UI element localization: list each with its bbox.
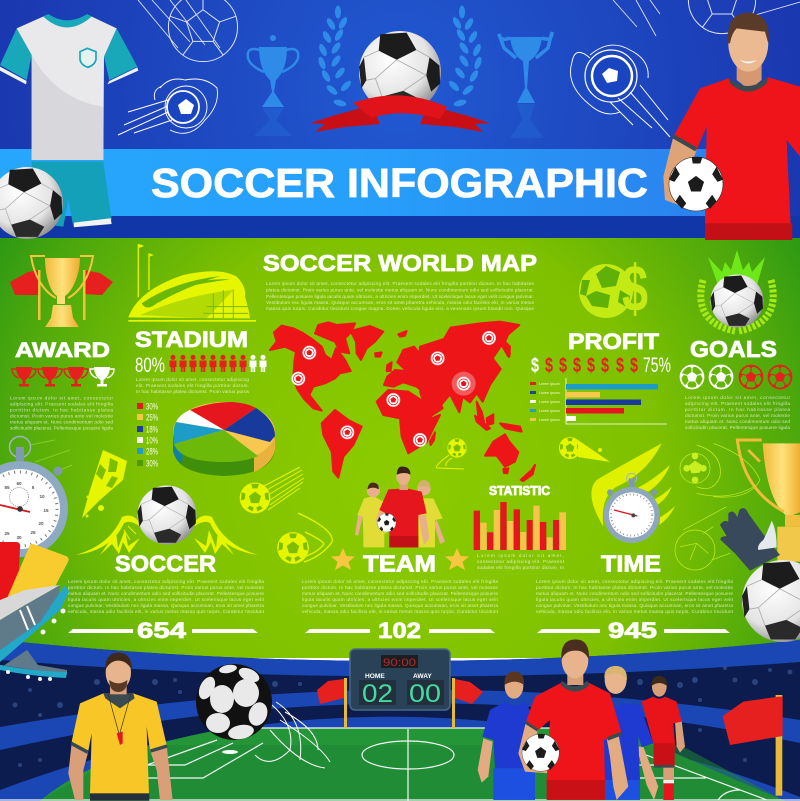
- stat: 654: [68, 618, 258, 643]
- text: team: congue pulvinar. Vestibulum nec ligula massa. Quisque accumsan, eros sit amet pharetra: [302, 603, 498, 608]
- flying ball trail 1: [240, 467, 304, 513]
- bar chart legend: Lorem ipsum: [539, 418, 560, 422]
- bar chart legend: [530, 382, 560, 422]
- red player center: [376, 467, 429, 547]
- bar chart legend: Lorem ipsum: [539, 409, 560, 413]
- text: award: [10, 396, 113, 430]
- text: soccer: congue pulvinar. Vestibulum nec ligula massa. Quisque accumsan, eros sit amet pharetra: [68, 603, 264, 608]
- referee: [68, 653, 173, 801]
- icon: stopwatch: [604, 473, 660, 543]
- text: team: Lorem ipsum dolor sit amet, consectetur adipiscing elit. Praesent sodales elit fringilla: [302, 579, 498, 584]
- text: soccer: ligula iaculis quam ultricies, a ultricies enim imperdiet. Ut scelerisque lacus eget velit: [68, 597, 265, 602]
- text: time: Lorem ipsum dolor sit amet, consectetur adipiscing elit. Praesent sodales elit fringilla: [536, 579, 733, 584]
- icon: stadium: [128, 244, 256, 322]
- pie legend: 30%: [146, 458, 158, 468]
- text: team: vehicula, massa odio facilisis elit, in varius metus massa quis turpis. Curabitur tincidunt: [302, 609, 499, 614]
- text: goals: sollicitudin placerat. Pellentesque posuere ligula: [685, 425, 790, 430]
- text: goals: adipiscing elit. Praesent sodales elit fringilla: [685, 401, 790, 406]
- column chart: [474, 502, 566, 550]
- icon: crown: [708, 250, 765, 285]
- text: team: [302, 579, 499, 614]
- text: world map: platea dictumst. Proin varius purus ante, vel molestie metus aliquam et. Nunc condimentum odio sed sollicitudin placerat.: [266, 288, 534, 292]
- text: soccer: vehicula, massa odio facilisis elit, in varius metus massa quis turpis. Curabitur tincidunt: [68, 609, 265, 614]
- heading: time: TIME: [601, 550, 661, 576]
- text: award: sollicitudin placerat. Pellentesque posuere ligula: [10, 426, 113, 430]
- center soccer ball: [359, 31, 441, 113]
- stadium background: [0, 640, 800, 801]
- text: goals: [685, 395, 790, 430]
- title band: [0, 149, 800, 238]
- stopwatch left: 10: [39, 494, 45, 499]
- stopwatch left: 30: [16, 535, 22, 540]
- player: blue left: [478, 672, 535, 800]
- ball: right edge: [742, 560, 800, 642]
- sketch ball: right: [680, 443, 760, 497]
- text: world map: [266, 281, 535, 311]
- stat: 102: 102: [378, 618, 421, 643]
- pie legend: 18%: [146, 424, 158, 434]
- large ball: [196, 663, 330, 768]
- bar chart legend: Lorem ipsum: [539, 382, 560, 386]
- text: time: congue pulvinar. Vestibulum nec ligula massa. Quisque accumsan, eros sit amet pharetra: [536, 603, 733, 608]
- text: award: adipiscing elit. Praesent sodales elit fringilla: [10, 402, 113, 406]
- sketch ball: top right: [613, 0, 800, 36]
- dollar pictogram: [531, 355, 638, 377]
- flying ball icon: right of map: [559, 437, 610, 462]
- text: statistic: consectetur adipiscing elit. Praesent: [477, 559, 565, 564]
- stopwatch left: 5: [32, 485, 35, 490]
- pie legend: [137, 402, 158, 468]
- text: world map: Pellentesque posuere ligula iaculis quam ultricies, a ultricies enim imperdiet. Ut scelerisque lacus eget velit congue pulvinar.: [266, 294, 534, 299]
- heading: team: TEAM: [363, 550, 436, 576]
- panel: award: [10, 256, 114, 430]
- text: team: porttitor dictum. In hac habitasse platea dictumst. Proin varius purus ante, vel molestie: [302, 585, 498, 590]
- background green infographic panel: [0, 238, 800, 658]
- stat: 102: [305, 618, 495, 643]
- text: stadium: elit. Praesent sodales elit fringilla porttitor dictum.: [136, 383, 249, 388]
- stopwatch left: 25: [4, 531, 10, 536]
- text: award: Lorem ipsum dolor sit amet, consectetur: [10, 396, 113, 400]
- pictogram people: [170, 355, 266, 372]
- icon: red flags: [10, 270, 113, 320]
- text: time: metus aliquam et. Nunc condimentum odio sed sollicitudin placerat. Pellentesque posuere: [536, 591, 733, 596]
- bar chart: [566, 378, 667, 424]
- panel: stadium: [128, 244, 275, 476]
- text: world map: massa quis turpis. Curabitur tincidunt congue magna. Donec vehicula ligula nisi, a venenatis ipsum blandit non. Quisque: [266, 306, 534, 311]
- text: award: porttitor dictum. In hac habitasse platea: [10, 408, 113, 412]
- bar chart legend: Lorem ipsum: [539, 400, 560, 404]
- stars: [331, 548, 469, 570]
- corner flag: [723, 695, 783, 796]
- flying ball right: [570, 45, 690, 137]
- scoreboard: 02: [362, 680, 393, 708]
- text: time: vehicula, massa odio facilisis elit, in varius metus massa quis turpis. Curabitur tincidunt: [536, 609, 734, 614]
- heading: profit: PROFIT: [568, 329, 660, 354]
- text: soccer: porttitor dictum. In hac habitasse platea dictumst. Proin varius purus ante, vel molestie: [68, 585, 264, 590]
- blue trophy left: [248, 35, 298, 136]
- scoreboard: 00: [409, 680, 441, 708]
- stopwatch left: 25: [30, 530, 36, 535]
- heading: award: AWARD: [15, 339, 110, 362]
- text: statistic: [477, 553, 565, 570]
- laurel wreath: [317, 6, 483, 108]
- jersey with shorts: [0, 14, 138, 227]
- panel: team: [302, 467, 499, 643]
- flying ball icon: left: [82, 450, 127, 518]
- flag right of scoreboard: [452, 678, 483, 728]
- stat: 80 percent: 80%: [135, 354, 165, 377]
- yellow player left: [355, 483, 387, 547]
- text: award: metus aliquam et. Nunc condimentum odio sed: [10, 420, 113, 424]
- yellow player right: [417, 480, 445, 547]
- scoreboard: AWAY: [413, 673, 432, 680]
- red and yellow cards: [0, 542, 69, 607]
- heading: stadium: STADIUM: [135, 327, 248, 352]
- sketch ball: top left: [138, 0, 238, 62]
- scoreboard: 90:00: [383, 657, 416, 669]
- dollar pictogram: $: [573, 355, 581, 377]
- dollar pictogram: $: [616, 355, 624, 377]
- stat: 945: 945: [608, 618, 657, 643]
- shoes: [0, 585, 69, 708]
- scoreboard: [350, 649, 450, 710]
- map markers: [292, 331, 496, 447]
- text: statistic: Lorem ipsum dolor sit amet,: [477, 553, 564, 558]
- icon row: balls: [680, 366, 792, 388]
- blue trophy right: [499, 32, 552, 138]
- text: team: metus aliquam et. Nunc condimentum odio sed sollicitudin placerat. Pellentesque posuere: [302, 591, 498, 596]
- text: time: ligula iaculis quam ultricies, a ultricies enim imperdiet. Ut scelerisque lacus eget velit: [536, 597, 734, 602]
- pie legend: 28%: [146, 446, 158, 456]
- heading: world map: SOCCER WORLD MAP: [263, 250, 537, 276]
- team players: [355, 467, 445, 547]
- text: team: ligula iaculis quam ultricies, a ultricies enim imperdiet. Ut scelerisque lacus eget velit: [302, 597, 499, 602]
- text: soccer: metus aliquam et. Nunc condimentum odio sed sollicitudin placerat. Pellentesque posuere: [68, 591, 264, 596]
- player: blue right: [603, 666, 658, 800]
- player: far right: [642, 676, 685, 800]
- pitch: [0, 728, 800, 801]
- stopwatch left: 60: [16, 481, 22, 486]
- scoreboard: HOME: [365, 673, 385, 680]
- flag left of scoreboard: [317, 678, 347, 728]
- goals ball: [710, 274, 764, 328]
- stat: 75 percent: 75%: [643, 354, 671, 377]
- icon: ball with wings: [76, 486, 258, 555]
- text: goals: Lorem ipsum dolor sit amet, consectetur: [685, 395, 790, 400]
- text: stadium: [136, 377, 250, 394]
- header background: [0, 0, 800, 238]
- panel: time: [591, 443, 675, 543]
- players group: [478, 639, 685, 800]
- dollar pictogram: $: [587, 355, 595, 377]
- bar chart legend: Lorem ipsum: [539, 391, 560, 395]
- heading: soccer: SOCCER: [115, 550, 216, 576]
- text: world map: Lorem ipsum dolor sit amet, consectetur adipiscing elit. Praesent sodales elit fringilla porttitor dictum. In hac habitasse: [266, 281, 534, 286]
- stopwatch left: 15: [43, 508, 49, 513]
- stopwatch left: 20: [38, 521, 44, 526]
- dollar pictogram: $: [601, 355, 609, 377]
- text: stadium: In hac habitasse platea dictumst. Proin varius purus: [136, 389, 250, 394]
- dollar pictogram: $: [559, 355, 567, 377]
- panel: statistic: [474, 484, 566, 570]
- text: stadium: Lorem ipsum dolor sit amet, consectetur adipiscing: [136, 377, 249, 382]
- heading: goals: GOALS: [690, 336, 777, 362]
- flying ball trail 2: [277, 513, 332, 564]
- stat: 945: [537, 618, 730, 643]
- player: red center: [518, 639, 628, 800]
- dollar pictogram: $: [531, 355, 539, 377]
- sketch ball: below map: [436, 438, 467, 469]
- player in header: [663, 13, 800, 240]
- text: goals: porttitor dictum. In hac habitasse platea: [685, 407, 790, 412]
- icon: laurel: [701, 280, 773, 331]
- stat: 654: 654: [137, 618, 187, 643]
- stopwatch left: 55: [4, 485, 10, 490]
- panel: goals: [680, 250, 792, 430]
- text: time: porttitor dictum. In hac habitasse platea dictumst. Proin varius purus ante, vel molestie: [536, 585, 733, 590]
- icon: gold trophy: [31, 256, 93, 327]
- dollar pictogram: $: [630, 355, 638, 377]
- panel: soccer: [68, 486, 265, 643]
- text: statistic: sodales elit fringilla porttitor dictum. In: [477, 565, 564, 570]
- red ribbon: [310, 95, 490, 132]
- panel: profit: [530, 251, 671, 424]
- text: time: [536, 579, 734, 614]
- heading: statistic: STATISTIC: [489, 484, 550, 498]
- pie legend: 25%: [146, 412, 158, 422]
- pie legend: 10%: [146, 436, 158, 446]
- world map: [270, 322, 535, 481]
- icon: swoosh: [591, 443, 675, 527]
- icon: profit ball: [579, 264, 633, 318]
- text: world map: Vestibulum nec ligula massa. Quisque accumsan, eros sit amet pharetra vehicula, massa odio facilisis elit, in varius metus: [266, 300, 535, 305]
- pie chart: [173, 402, 275, 476]
- text: soccer: Lorem ipsum dolor sit amet, consectetur adipiscing elit. Praesent sodales elit fringilla: [68, 579, 264, 584]
- icon: dollar sign: $: [622, 251, 648, 325]
- panel: world map: [263, 250, 537, 481]
- title: SOCCER INFOGRAPHIC: [151, 160, 648, 206]
- goalkeeper glove: [720, 508, 780, 571]
- text: award: dictumst. Proin varius purus ante vel molestie: [10, 414, 113, 418]
- gold trophy right: [737, 440, 800, 562]
- text: soccer: [68, 579, 265, 614]
- pie legend: 30%: [146, 402, 158, 412]
- stopwatch left: [0, 436, 72, 557]
- ball: bottom left of header: [0, 167, 63, 239]
- dollar pictogram: $: [545, 355, 553, 377]
- sketch ball: lower right: [675, 507, 730, 570]
- flying ball left: [118, 79, 218, 135]
- text: goals: metus aliquam et. Nunc condimentum odio sed: [685, 419, 790, 424]
- icon row: cups: [12, 367, 114, 386]
- text: goals: dictumst. Proin varius purus ante, vel molestie: [685, 413, 790, 418]
